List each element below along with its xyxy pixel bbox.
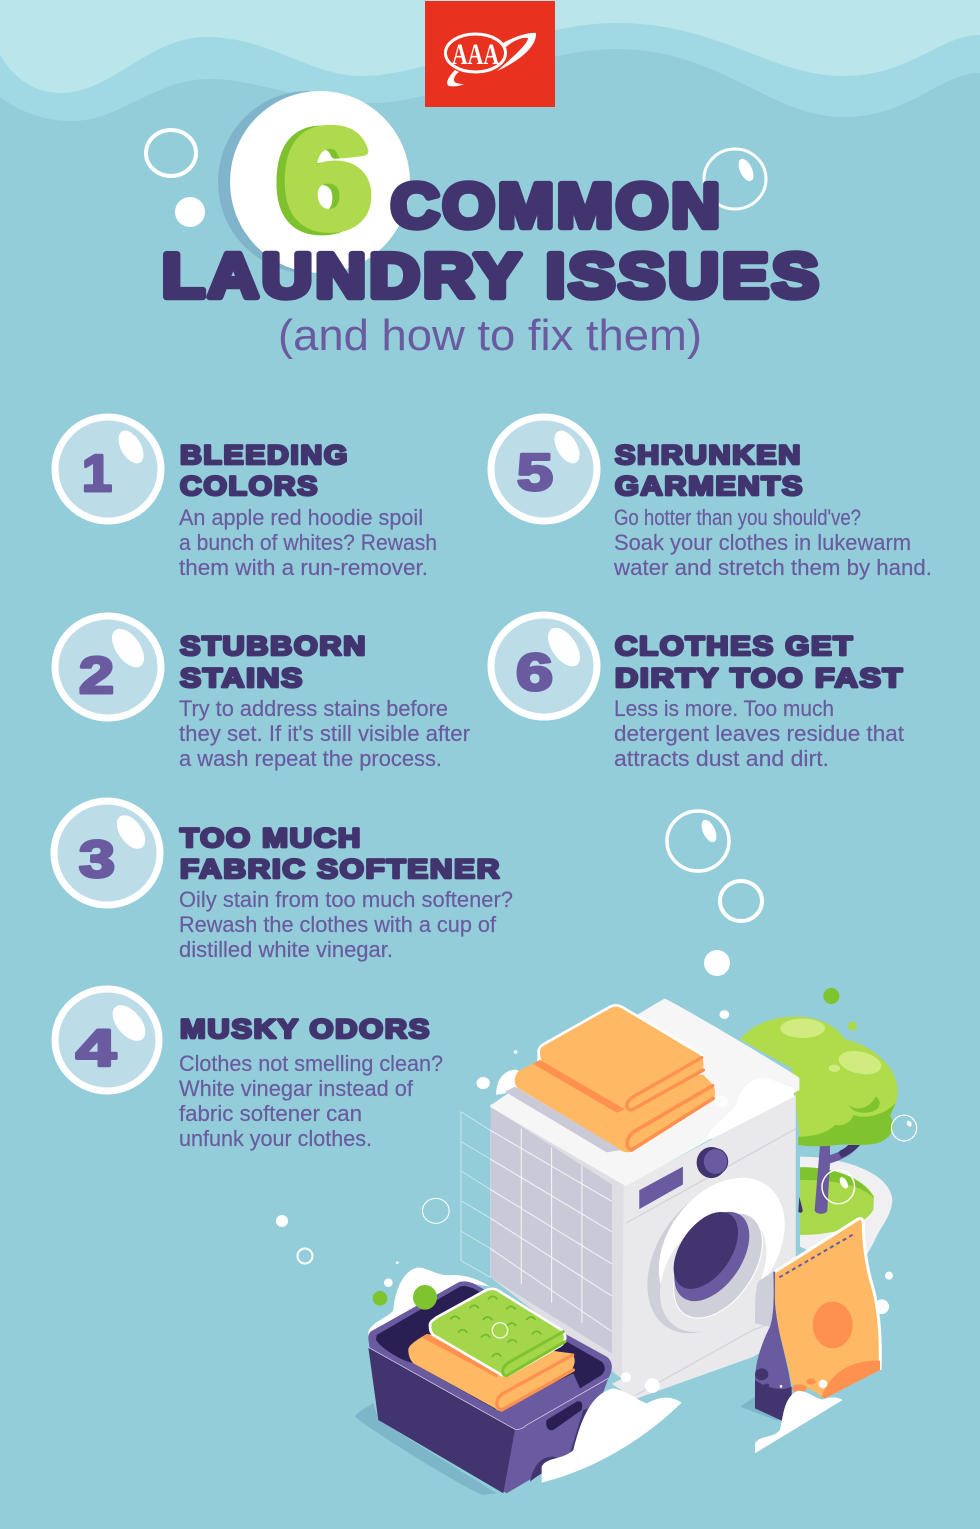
basket shadow [355, 1403, 497, 1495]
number bubble 4 [55, 989, 159, 1091]
number bubble 3 [54, 801, 160, 905]
laundry illustration [355, 988, 917, 1495]
basket body [368, 1281, 612, 1493]
bag [775, 1219, 880, 1398]
title: COMMON [391, 172, 723, 241]
foam behind basket [368, 1267, 490, 1337]
floating bubbles [276, 811, 762, 1264]
body 5: Go hotter than you should've? [614, 505, 861, 530]
foam on washer [496, 1070, 794, 1139]
number bubble 2: 2 [79, 647, 114, 705]
foam in front [542, 1388, 682, 1483]
heading 3: TOO MUCH [180, 823, 362, 853]
heading 1 [180, 440, 349, 501]
body 2 [179, 696, 470, 771]
body 4: Clothes not smelling clean? [179, 1051, 443, 1076]
heading 6: CLOTHES GET [615, 631, 854, 661]
heading 5: SHRUNKEN [615, 440, 802, 470]
number bubble 6 [491, 615, 597, 717]
trunk [815, 1145, 860, 1214]
heading 6: DIRTY TOO FAST [615, 663, 904, 693]
heading 2: STAINS [180, 663, 304, 693]
body 1: An apple red hoodie spoil [179, 505, 423, 530]
body 5: Soak your clothes in lukewarm [614, 530, 911, 555]
body 4: White vinegar instead of [179, 1076, 414, 1101]
number bubble 1 [55, 417, 161, 521]
heading 2 [180, 631, 367, 693]
issue 3 [54, 801, 513, 962]
grid outline [461, 1112, 491, 1277]
washing machine [461, 999, 810, 1399]
body 4 [179, 1051, 443, 1151]
body 6: detergent leaves residue that [614, 721, 904, 746]
issue 4 [55, 989, 443, 1151]
header waves [0, 0, 980, 121]
numeral 6: 6 [284, 100, 372, 257]
body 4: fabric softener can [179, 1101, 362, 1126]
issue 1 [55, 417, 437, 580]
heading 3 [180, 823, 501, 884]
shadow and washer shade [740, 1397, 780, 1422]
numeral 6: 6 [275, 100, 365, 261]
number bubble 4: 4 [76, 1020, 116, 1078]
plant [740, 988, 898, 1273]
heading 1: COLORS [180, 471, 319, 501]
AAA logo [425, 1, 555, 107]
towels in basket [408, 1289, 575, 1411]
issue 2 [55, 616, 470, 771]
issue 5 [491, 417, 932, 580]
subtitle: (and how to fix them) [278, 311, 702, 360]
side panel [491, 1103, 626, 1379]
soap bubbles [423, 1010, 917, 1223]
number bubble 6: 6 [516, 644, 553, 702]
folded towels on washer [505, 1007, 715, 1152]
title: LAUNDRY ISSUES [162, 242, 822, 311]
body 1 [179, 505, 437, 580]
body 3: Oily stain from too much softener? [179, 887, 513, 912]
body 1: them with a run-remover. [179, 555, 428, 580]
display [639, 1167, 683, 1209]
body 3: distilled white vinegar. [179, 937, 393, 962]
foam by bag [755, 1391, 843, 1453]
heading 4: MUSKY ODORS [180, 1014, 431, 1044]
body 2: Try to address stains before [179, 696, 448, 721]
number bubble 1: 1 [82, 445, 112, 503]
number bubble 3: 3 [79, 831, 115, 889]
AAA logo: AAA [452, 38, 499, 71]
heading 5 [615, 440, 804, 501]
heading 1: BLEEDING [180, 440, 349, 470]
dial [697, 1147, 728, 1178]
body 6: Less is more. Too much [614, 696, 834, 721]
title [162, 172, 822, 311]
body 3: Rewash the clothes with a cup of [179, 912, 497, 937]
body 4: unfunk your clothes. [179, 1126, 372, 1151]
heading 2: STUBBORN [180, 631, 367, 661]
body 2: a wash repeat the process. [179, 746, 442, 771]
body 6: attracts dust and dirt. [614, 746, 829, 771]
green balls [373, 1261, 437, 1310]
heading 5: GARMENTS [615, 471, 804, 501]
heading 6 [615, 631, 904, 693]
body 5 [613, 505, 932, 580]
front panel [612, 1095, 796, 1399]
top panel [490, 999, 799, 1186]
door [622, 1157, 810, 1353]
laundry basket [355, 1261, 682, 1495]
number bubble 5 [491, 417, 597, 521]
body 1: a bunch of whites? Rewash [179, 530, 437, 555]
body 2: they set. If it's still visible after [179, 721, 470, 746]
decorative title bubbles [146, 130, 766, 227]
number bubble 5: 5 [517, 444, 553, 502]
heading 3: FABRIC SOFTENER [180, 854, 501, 884]
white bubble behind bag [874, 1299, 889, 1314]
detergent bottle and bag [740, 1219, 893, 1453]
body 5: water and stretch them by hand. [613, 555, 932, 580]
number bubble 2 [55, 616, 161, 718]
pot [800, 1157, 892, 1273]
large title bubble [218, 91, 410, 273]
issue 6 [491, 615, 904, 771]
body 3 [179, 887, 513, 962]
foliage [740, 1017, 898, 1146]
body 6 [614, 696, 904, 771]
bottle [755, 1272, 792, 1421]
